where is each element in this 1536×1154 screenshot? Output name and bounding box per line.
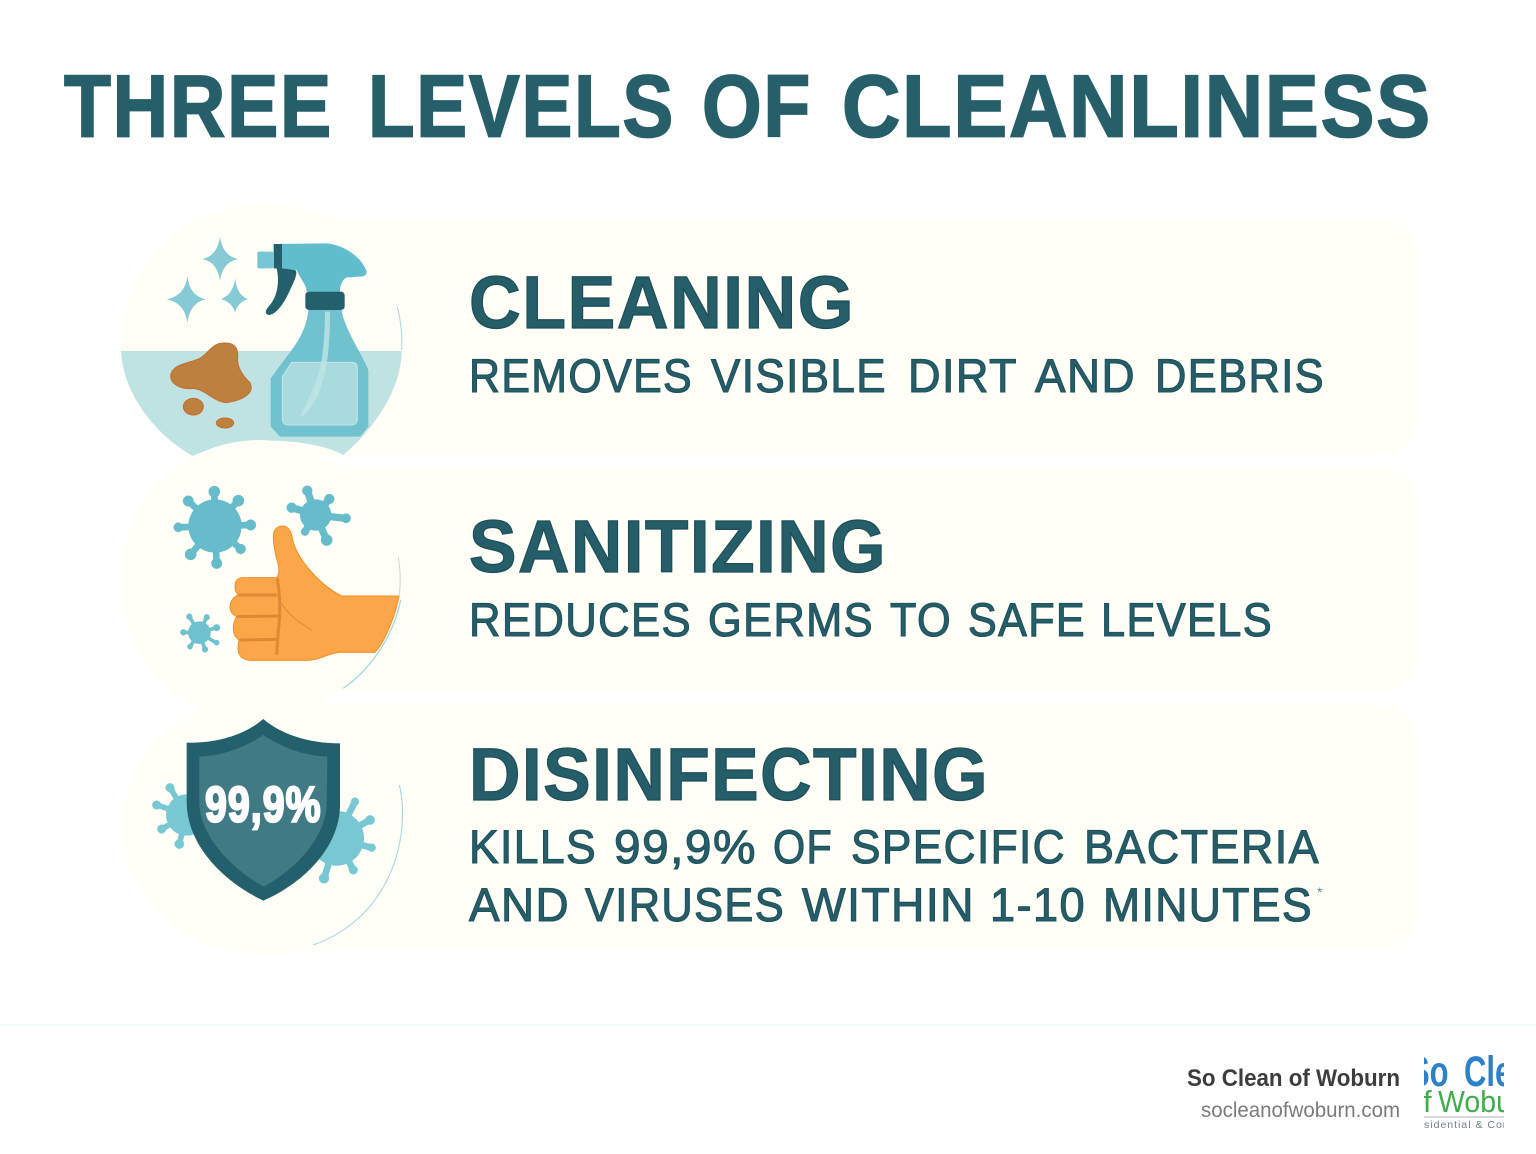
icon: spray bottle on surface [121,237,402,456]
trigger [266,244,296,315]
description: cleaning: DEBRIS [1155,350,1325,403]
description: disinfecting: MINUTES [1103,879,1313,932]
description: disinfecting: WITHIN [802,879,975,932]
brand url: socleanofwoburn.com [1201,1099,1400,1122]
description: disinfecting: 1-10 [990,879,1086,932]
footer [0,1024,1536,1131]
footer rule [0,1024,1536,1026]
edge arc [313,785,402,945]
description: sanitizing: SAFE [968,594,1086,647]
panel background: disinfecting [121,697,1418,954]
shield inner [199,735,327,887]
edge arc [398,557,400,597]
description: disinfecting: KILLS [469,821,597,874]
panel: sanitizing [119,440,1418,720]
title: LEVELS [368,56,675,156]
icon: shield with germs [152,719,402,945]
description: disinfecting: 99,9% [614,821,757,874]
germ small [180,614,220,652]
collar [305,292,345,310]
description: disinfecting: AND [469,879,570,932]
description: sanitizing: GERMS [708,594,874,647]
description: disinfecting: * [1317,884,1323,900]
panel background: cleaning [120,203,1418,455]
sprayer head [273,243,367,292]
title: OF [702,56,812,156]
description: sanitizing: REDUCES [469,594,692,647]
germ right [309,798,376,883]
description: cleaning [469,350,1325,403]
icon: thumbs up with germs [174,486,401,688]
shield outer [187,719,340,901]
shield label: 99,9% [205,776,322,832]
description: cleaning: VISIBLE [711,350,887,403]
surface [121,351,402,456]
bottle body [271,310,368,437]
description: sanitizing [469,594,1273,647]
germ left [152,783,207,849]
panel background: sanitizing [119,440,1418,720]
germ large [174,486,256,569]
hand [230,526,399,660]
dirt stains [171,343,251,428]
logo (cropped) [1424,1055,1504,1128]
heading: cleaning: CLEANING [469,261,855,344]
logo (cropped): f [1423,1084,1432,1119]
heading: disinfecting: DISINFECTING [469,733,989,816]
description: cleaning: REMOVES [469,350,693,403]
heading: sanitizing: SANITIZING [469,505,887,588]
description: disinfecting: OF [773,821,833,874]
germ medium [287,486,351,546]
description: cleaning: DIRT [908,350,1018,403]
panel: disinfecting [121,697,1418,954]
logo (cropped): Woburn [1438,1085,1536,1119]
description: sanitizing: TO [890,594,952,647]
description: sanitizing: LEVELS [1101,594,1273,647]
dip tube [300,312,330,418]
description: disinfecting: VIRUSES [585,879,785,932]
title [64,56,1432,156]
bottle window [282,362,357,425]
logo (cropped): So [1409,1047,1449,1095]
panel: cleaning [120,203,1418,456]
description: disinfecting: SPECIFIC [851,821,1066,874]
description: disinfecting [469,821,1323,932]
description: cleaning: AND [1035,350,1136,403]
palm crease [282,603,312,630]
title: CLEANLINESS [842,56,1432,156]
title: THREE [64,56,333,156]
sparkles [167,237,248,323]
edge arc [397,307,402,350]
finger creases [237,578,280,655]
description: disinfecting: BACTERIA [1084,821,1320,874]
nozzle [257,252,273,268]
brand name: So Clean of Woburn [1187,1065,1400,1092]
